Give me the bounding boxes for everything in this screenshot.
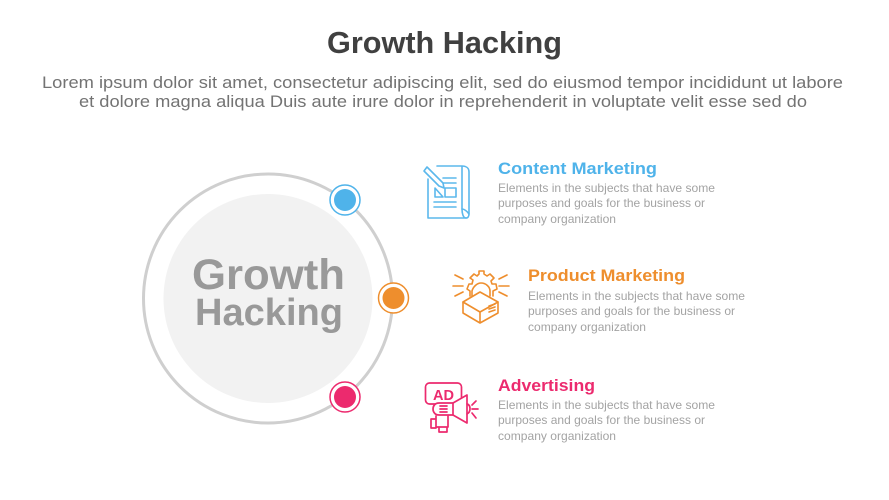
center label: Hacking	[195, 292, 343, 334]
content marketing text: purposes and goals for the business or	[498, 196, 705, 210]
product marketing text: company organization	[528, 320, 646, 334]
subtitle: Lorem ipsum dolor sit amet, consectetur adipiscing elit, sed do eiusmod tempor incididunt ut labore	[42, 74, 843, 92]
inner circle	[164, 194, 372, 403]
advertising heading: Advertising	[498, 376, 595, 395]
product marketing text: purposes and goals for the business or	[528, 304, 735, 318]
icon: document with pencil	[424, 166, 469, 218]
content marketing heading: Content Marketing	[498, 159, 657, 178]
icon: AD megaphone: AD	[433, 387, 454, 404]
icon: gear and box	[453, 271, 509, 323]
advertising text	[498, 398, 715, 443]
subtitle: et dolore magna aliqua Duis aute irure dolor in reprehenderit in voluptate velit esse sed do	[79, 93, 807, 111]
node: pink	[330, 382, 360, 412]
title: Growth Hacking	[327, 25, 562, 60]
content marketing text: company organization	[498, 212, 616, 226]
node: blue	[330, 185, 360, 215]
product marketing heading: Product Marketing	[528, 266, 685, 285]
content marketing text: Elements in the subjects that have some	[498, 181, 715, 195]
advertising text: Elements in the subjects that have some	[498, 398, 715, 412]
center label	[192, 251, 345, 334]
outer ring	[144, 174, 392, 423]
content marketing text	[498, 181, 715, 226]
advertising text: company organization	[498, 429, 616, 443]
advertising text: purposes and goals for the business or	[498, 413, 705, 427]
product marketing text: Elements in the subjects that have some	[528, 289, 745, 303]
icon: AD megaphone	[426, 383, 478, 432]
subtitle	[42, 74, 843, 111]
product marketing text	[528, 289, 745, 334]
center label: Growth	[192, 251, 345, 299]
node: orange	[378, 283, 408, 313]
